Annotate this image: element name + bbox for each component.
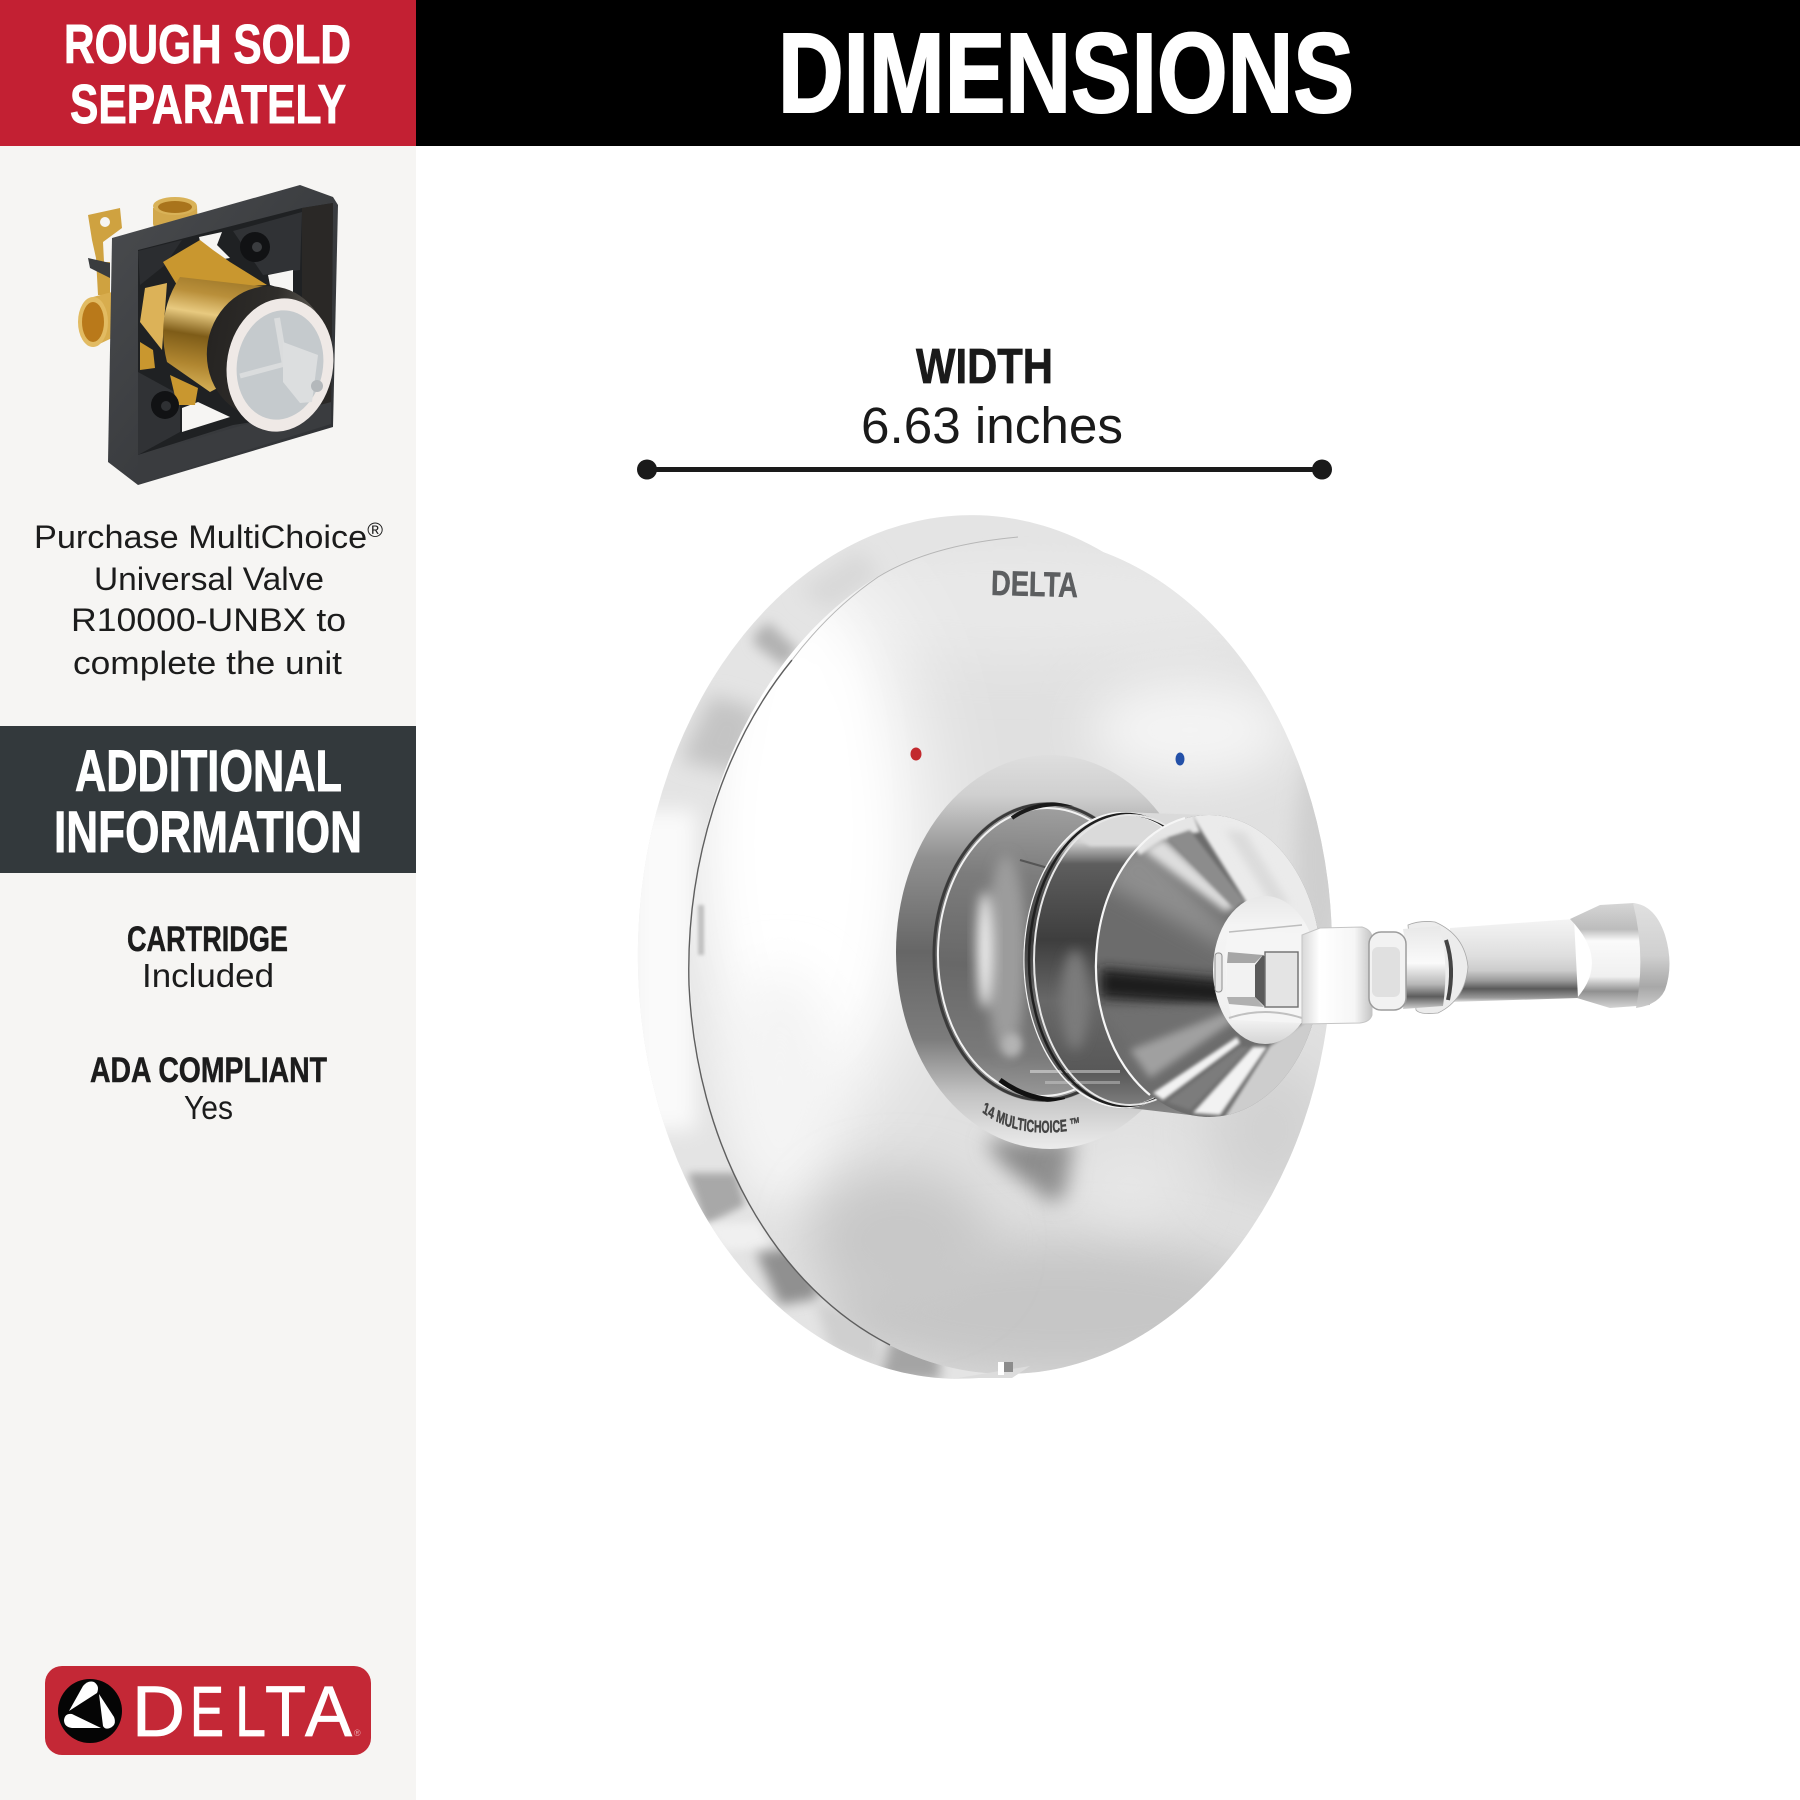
text block: purchase note: ®	[367, 520, 383, 542]
dimension value: 6.63 inches	[861, 397, 1123, 454]
panel: additional information heading	[0, 726, 416, 873]
icon: Delta logo	[45, 1666, 371, 1755]
engraved brand: DELTA	[991, 564, 1079, 605]
text block: cartridge: CARTRIDGE	[127, 920, 288, 959]
hot indicator	[910, 748, 922, 760]
valve frame	[108, 185, 338, 485]
logo wordmark: D	[132, 1673, 185, 1752]
logo wordmark: A	[305, 1673, 353, 1752]
handle hex nut	[1215, 925, 1302, 1023]
text block: purchase note: R10000-UNBX to	[71, 602, 346, 638]
handle sleeve	[1403, 926, 1445, 1009]
logo wordmark: E	[190, 1673, 224, 1752]
banner heading line two: SEPARATELY	[70, 73, 346, 135]
text block: purchase note: Universal Valve	[94, 561, 324, 597]
product: shower valve trim	[638, 515, 1670, 1379]
brass mounting tab	[88, 208, 122, 295]
panel: additional information heading: INFORMATION	[54, 800, 362, 865]
back plate rim	[638, 515, 1103, 1379]
cold indicator	[1176, 752, 1184, 766]
panel: rough sold separately banner	[0, 0, 416, 146]
front face	[679, 528, 1345, 1382]
flange recess	[932, 802, 1096, 1102]
dimension label: width	[861, 340, 1123, 454]
icon: rough-in valve product	[78, 185, 344, 485]
panel: dimensions header	[416, 0, 1800, 146]
panel: left sidebar	[0, 146, 416, 1800]
engraved rating text: 14 MULTICHOICE ™	[982, 1102, 1079, 1133]
valve cap	[196, 277, 344, 440]
bottom screw detail	[958, 1366, 1030, 1378]
handle shaft	[1450, 919, 1578, 1002]
knob body	[1023, 812, 1226, 1117]
text block: purchase note: complete the unit	[73, 645, 342, 681]
handle ring	[1408, 921, 1468, 1014]
brass valve body	[140, 240, 290, 405]
text block: purchase note	[34, 519, 383, 681]
text block: cartridge: Included	[142, 957, 274, 994]
brass top fitting	[153, 197, 198, 240]
brass left fitting	[78, 292, 112, 347]
banner heading line one: ROUGH SOLD	[64, 13, 351, 75]
logo wordmark: L	[235, 1673, 266, 1752]
text block: cartridge	[127, 920, 288, 994]
handle collar	[1302, 927, 1372, 1024]
handle cap	[1213, 896, 1317, 1044]
logo mark	[58, 1679, 122, 1743]
handle end flare	[1570, 903, 1670, 1008]
knob cone	[1094, 815, 1318, 1117]
escutcheon flange	[896, 761, 1160, 1149]
panel: additional information heading: ADDITIONAL	[75, 739, 342, 804]
text block: purchase note: Purchase MultiChoice	[34, 519, 345, 555]
black grommets	[151, 232, 270, 419]
text block: ADA compliant: ADA COMPLIANT	[90, 1051, 327, 1090]
title: DIMENSIONS	[778, 10, 1354, 136]
logo wordmark: T	[265, 1673, 306, 1752]
text block: ADA compliant: Yes	[184, 1089, 233, 1126]
dimension line	[637, 460, 1332, 480]
dimension label: width: WIDTH	[916, 340, 1053, 394]
handle clear hex	[1369, 932, 1406, 1010]
registered mark: ®	[354, 1728, 361, 1738]
text block: ADA compliant	[90, 1051, 327, 1126]
